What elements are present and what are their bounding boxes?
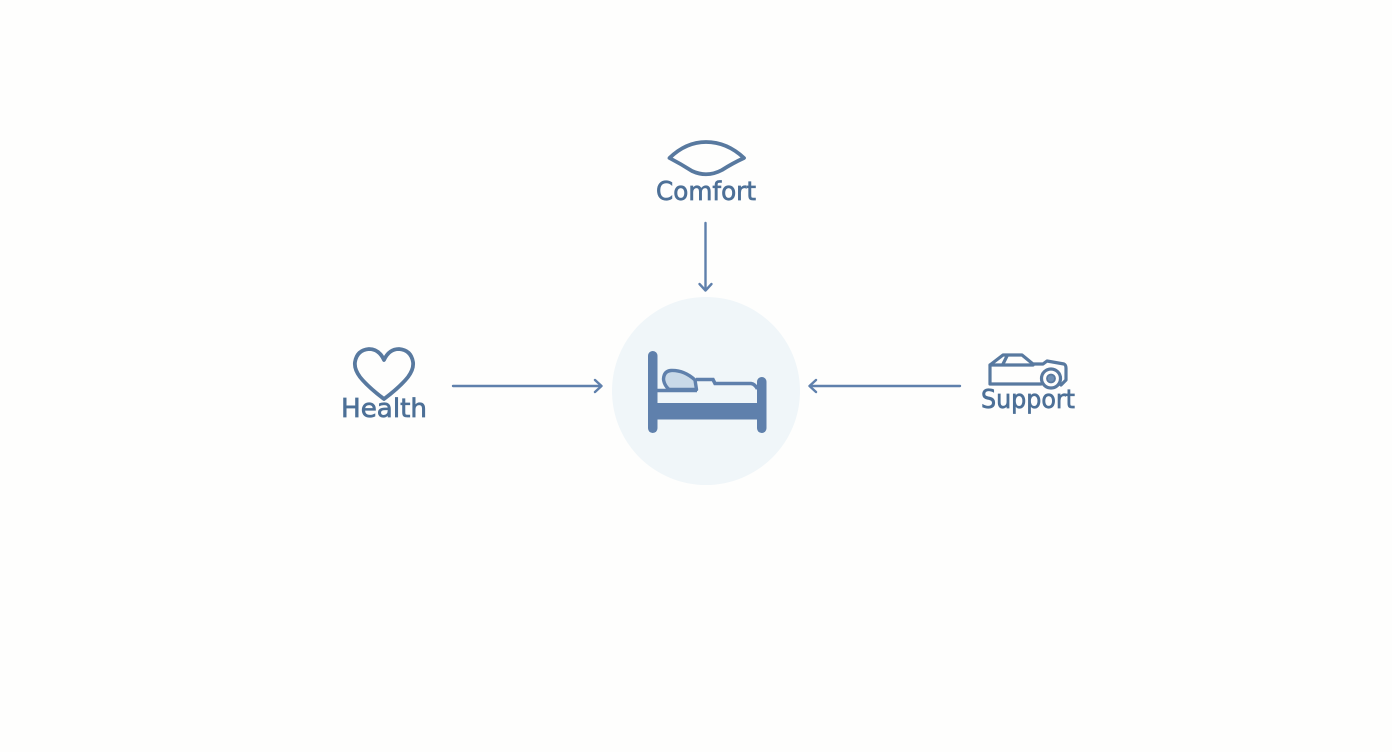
group: health bbox=[341, 349, 427, 424]
central circle with bed icon bbox=[612, 297, 800, 485]
icon: heart bbox=[355, 349, 413, 399]
icon: pillow bbox=[670, 142, 744, 174]
label: Comfort: Comfort bbox=[656, 177, 756, 207]
label: Support: Support bbox=[981, 385, 1075, 415]
icon: support vehicle bbox=[990, 355, 1066, 388]
icon: bed bbox=[648, 351, 766, 433]
label: Health: Health bbox=[341, 394, 427, 424]
arrow: comfort to bed bbox=[700, 223, 712, 290]
arrow: health to bed bbox=[453, 380, 602, 392]
group: comfort bbox=[656, 142, 756, 207]
arrow: support to bed bbox=[810, 380, 960, 392]
group: support bbox=[981, 355, 1075, 415]
